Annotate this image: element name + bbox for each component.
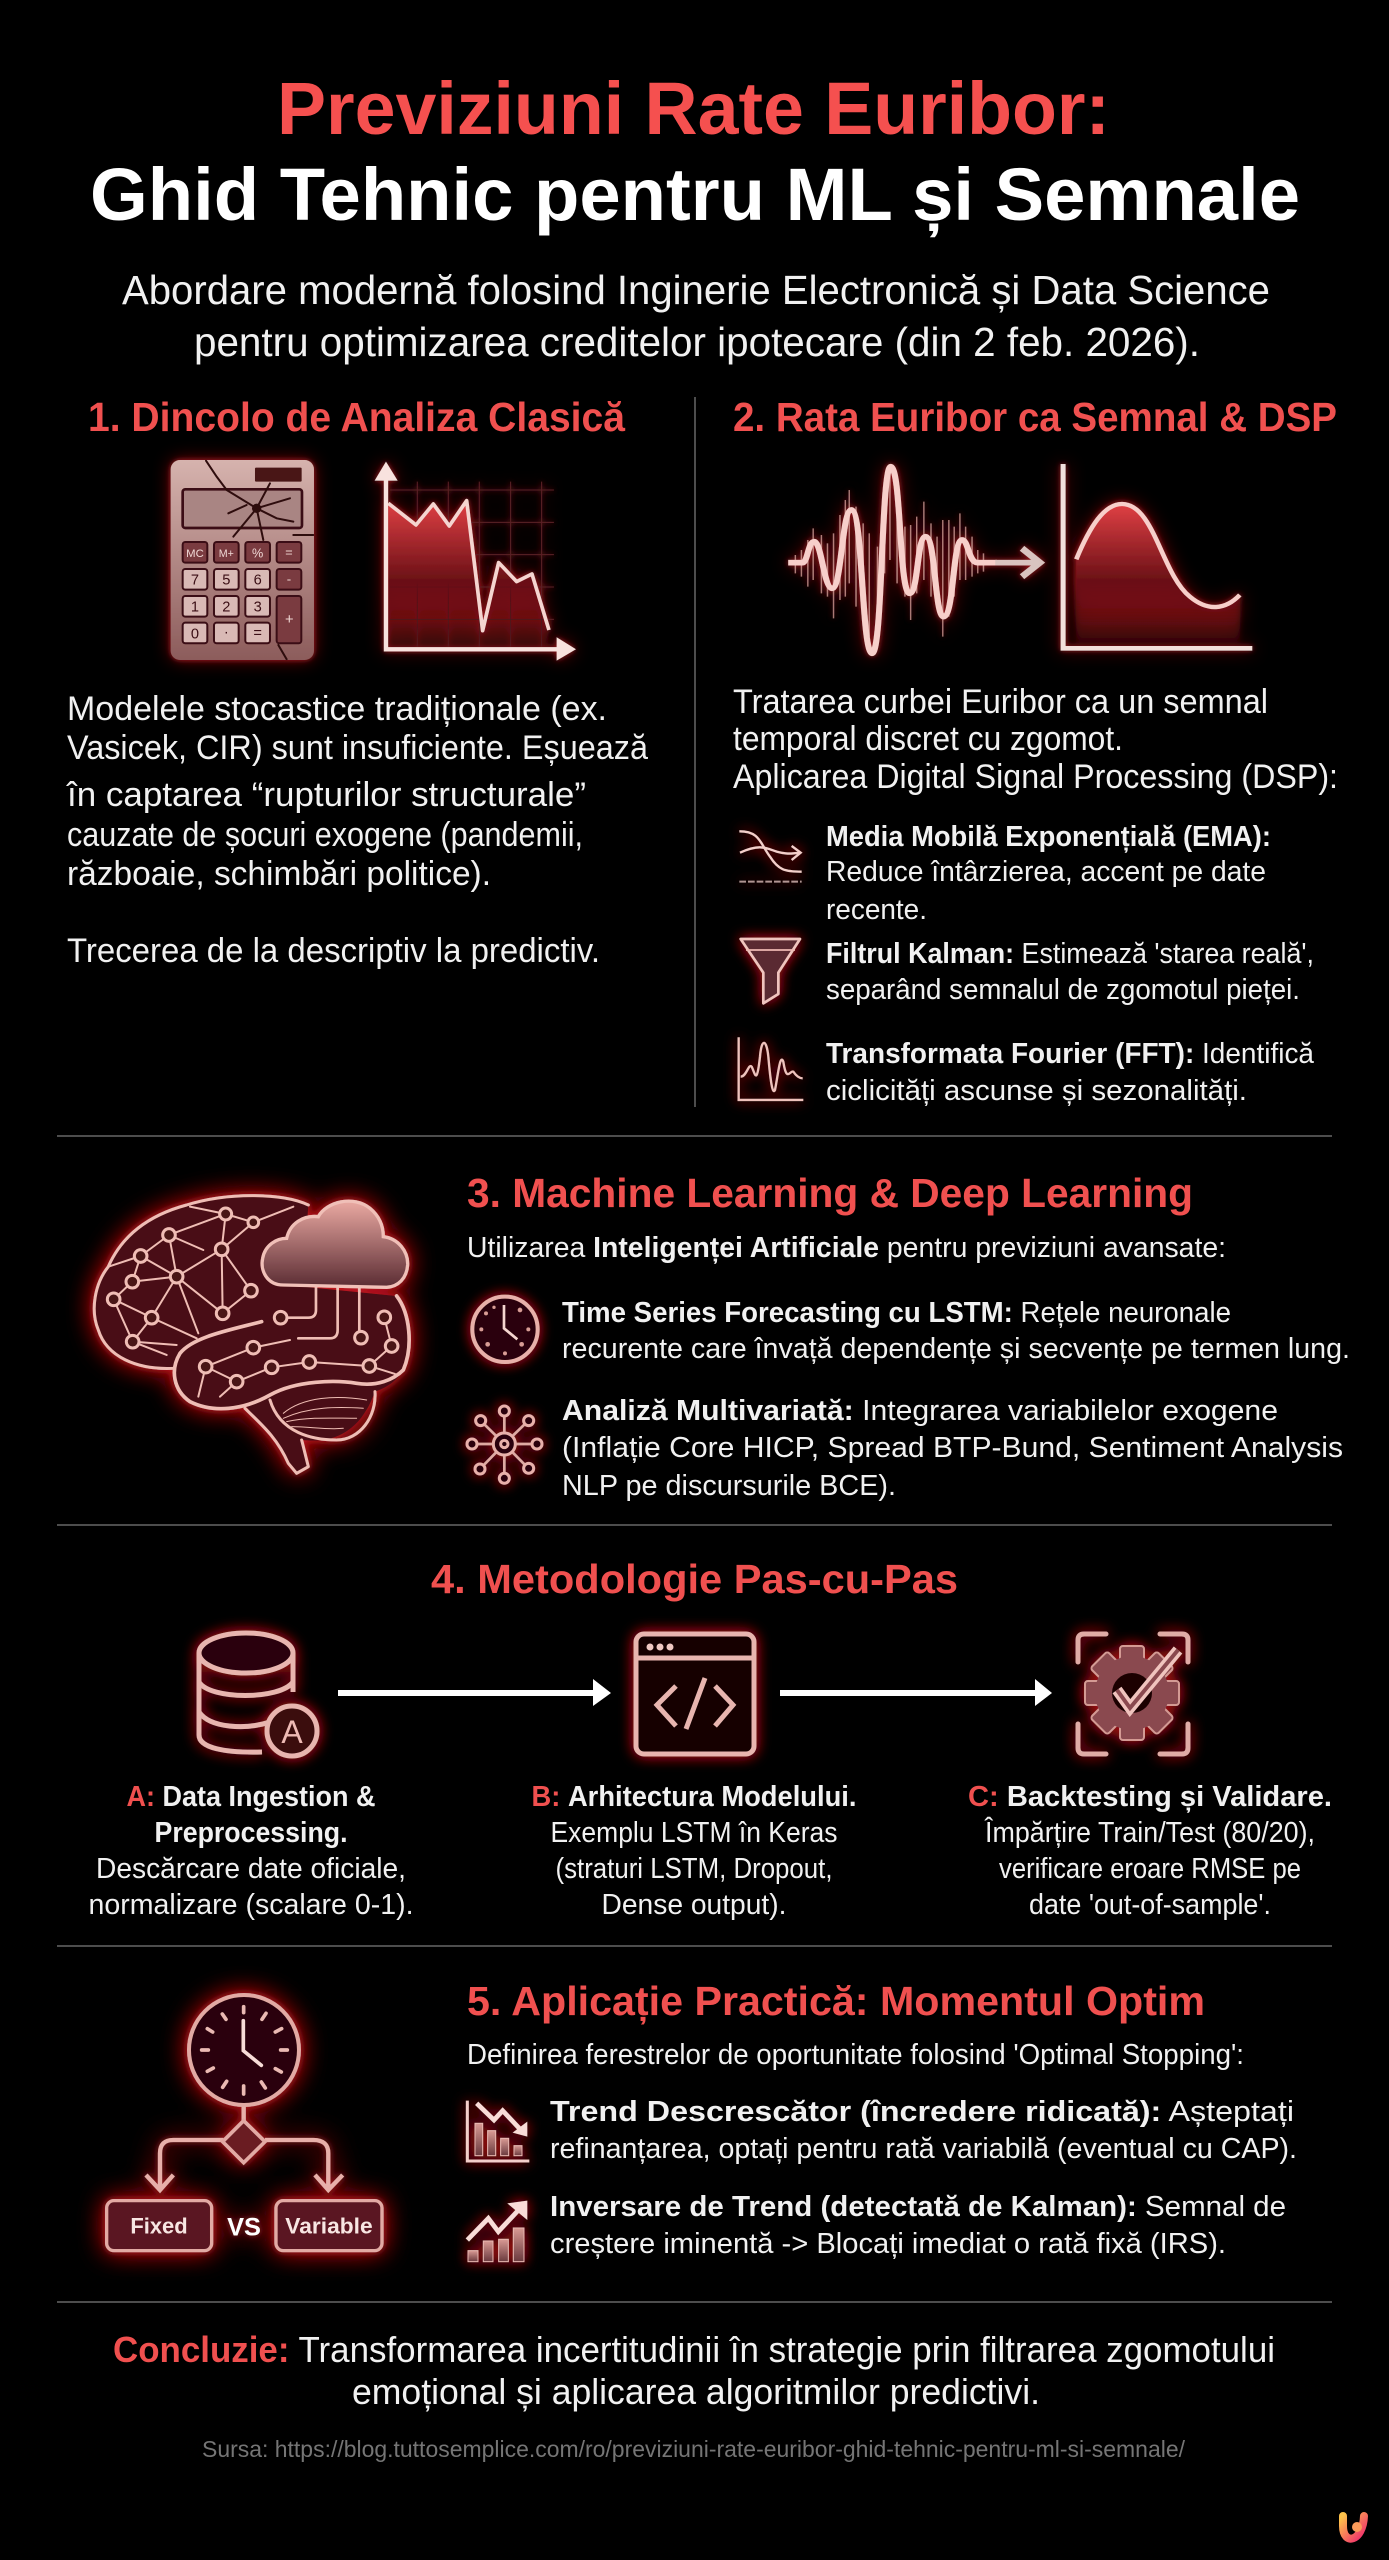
source: Sursa: https://blog.tuttosemplice.com/ro/previziuni-rate-euribor-ghid-tehnic-pentru-ml-si-semnale/ [202,2436,1186,2462]
subtitle: pentru optimizarea creditelor ipotecare (din 2 feb. 2026). [194,319,1200,365]
heading: section 2: 2. Rata Euribor ca Semnal & DSP [733,394,1337,440]
step B text: Dense output). [602,1889,786,1921]
step A text: Descărcare date oficiale, [96,1853,406,1885]
text: multivariate: NLP pe discursurile BCE). [562,1470,896,1502]
text block: classic models: în captarea “rupturilor structurale” [66,776,586,814]
text: Kalman: separând semnalul de zgomotul pieței. [826,974,1300,1006]
panel: section 2 [733,394,1338,1107]
icon: rising bars [467,2201,527,2262]
chart: filtered signal curve [1063,464,1252,648]
icon: clock [472,1297,538,1362]
icon: clock decision fixed vs variable: VS [227,2213,261,2241]
icon: clock decision fixed vs variable: Variable [285,2213,373,2238]
arrow: B to C [780,1679,1052,1706]
text: Kalman [826,938,1314,1006]
text: falling trend: refinanțarea, optați pentru rată variabilă (eventual cu CAP). [550,2133,1297,2165]
text: trend reversal: creștere iminentă -> Blocați imediat o rată fixă (IRS). [550,2228,1226,2260]
text: EMA: Media Mobilă Exponențială (EMA): [826,821,1271,853]
panel: section 4 [88,1556,1332,1921]
text: trend reversal [550,2191,1286,2260]
text: multivariate [562,1395,1343,1502]
icon: cracked calculator: 3 [254,600,262,616]
step B text [532,1781,856,1921]
text: LSTM [562,1297,1350,1365]
subtitle [122,267,1270,365]
conclusion: Concluzie: Transformarea incertitudinii în strategie prin filtrarea zgomotului [113,2329,1275,2370]
text block: signal intro [733,683,1338,796]
heading: section 4: 4. Metodologie Pas-cu-Pas [431,1556,958,1602]
title [90,67,1300,237]
icon: gear with check [1078,1634,1188,1754]
icon: cracked calculator: 0 [191,626,199,642]
icon: cracked calculator: + [285,612,294,628]
icon: code window [636,1634,754,1754]
icon: cracked calculator: 2 [222,600,230,616]
icon: cracked calculator: 7 [191,573,199,589]
heading: section 3: 3. Machine Learning & Deep Learning [467,1170,1193,1216]
text block: classic models: Trecerea de la descriptiv la predictiv. [67,932,600,970]
text block: signal intro: Tratarea curbei Euribor ca un semnal [733,683,1268,721]
text: EMA [826,821,1271,926]
conclusion [113,2329,1275,2412]
icon: cracked calculator: % [252,546,263,560]
icon: multivariate network [467,1406,542,1483]
icon: noisy signal with arrow [788,467,1040,653]
icon: EMA [739,831,802,882]
text: falling trend: Trend Descrescător (încredere ridicată): Așteptați [550,2096,1294,2128]
icon: database: A [281,1714,303,1750]
icon: brain with cloud [94,1196,409,1473]
step C text: date 'out-of-sample'. [1029,1889,1271,1921]
icon: cracked calculator: MC [186,548,204,560]
icon: cracked calculator: 1 [191,600,199,616]
step A text [88,1781,414,1921]
icon: database [199,1633,317,1756]
step A text: normalizare (scalare 0-1). [88,1889,414,1921]
panel: section 3 [94,1170,1350,1502]
subtitle: Abordare modernă folosind Inginerie Electronică și Data Science [122,267,1270,313]
text: falling trend [550,2096,1297,2165]
icon: cracked calculator: · [224,625,229,641]
icon: cracked calculator: 5 [222,573,230,589]
text: LSTM: Time Series Forecasting cu LSTM: Rețele neuronale [562,1297,1231,1329]
text: FFT: ciclicități ascunse și sezonalități. [826,1075,1247,1107]
text block: signal intro: temporal discret cu zgomot. [733,720,1123,758]
text block: classic models: Vasicek, CIR) sunt insuficiente. Eșuează [67,729,648,767]
icon: cracked calculator: 6 [254,573,262,589]
icon: cracked calculator: = [253,625,262,641]
step B text: (straturi LSTM, Dropout, [556,1853,832,1885]
panel: section 5 [107,1978,1297,2262]
text: LSTM: recurente care învață dependențe și secvențe pe termen lung. [562,1333,1350,1365]
step C text [968,1781,1332,1921]
icon: clock decision fixed vs variable [107,1995,382,2251]
icon: cracked calculator: - [287,571,291,586]
icon: FFT [739,1037,803,1100]
conclusion: emoțional și aplicarea algoritmilor predictivi. [352,2371,1040,2412]
text: AI intro: Utilizarea Inteligenței Artificiale pentru previziuni avansate: [467,1232,1226,1264]
step A text: A: Data Ingestion & [126,1781,376,1813]
step C text: verificare eroare RMSE pe [999,1853,1301,1885]
text: trend reversal: Inversare de Trend (detectată de Kalman): Semnal de [550,2191,1286,2223]
chart: falling line with grid [375,462,576,661]
icon: cracked calculator: = [285,546,293,560]
text: Kalman: Filtrul Kalman: Estimează 'starea reală', [826,938,1314,970]
icon: cracked calculator [171,460,314,660]
text block: classic models: războaie, schimbări politice). [67,855,491,893]
step C text: Împărțire Train/Test (80/20), [984,1816,1315,1849]
panel: section 1 [66,394,648,970]
text block: signal intro: Aplicarea Digital Signal Processing (DSP): [733,758,1338,796]
text block: classic models: Modelele stocastice tradiționale (ex. [67,690,607,728]
step B text: B: Arhitectura Modelului. [532,1781,856,1813]
title: Ghid Tehnic pentru ML și Semnale [90,153,1300,237]
icon: Kalman funnel [741,939,800,1003]
title: Previziuni Rate Euribor: [277,67,1110,150]
text: optimal stopping intro: Definirea ferestrelor de oportunitate folosind 'Optimal Stopping': [467,2039,1244,2071]
icon: cracked calculator: M+ [219,548,234,560]
step B text: Exemplu LSTM în Keras [550,1817,838,1849]
heading: section 1: 1. Dincolo de Analiza Clasică [88,394,626,440]
text: EMA: recente. [826,894,927,926]
text: FFT [826,1038,1315,1107]
step A text: Preprocessing. [154,1817,348,1849]
arrow: A to B [338,1679,611,1706]
icon: logo [1343,2516,1364,2539]
text: EMA: Reduce întârzierea, accent pe date [826,856,1266,888]
icon: falling bars [467,2101,529,2161]
text: multivariate: (Inflație Core HICP, Spread BTP-Bund, Sentiment Analysis [562,1432,1343,1464]
text block: classic models [66,690,648,970]
text block: classic models: cauzate de șocuri exogene (pandemii, [67,816,583,854]
heading: section 5: 5. Aplicație Practică: Momentul Optim [467,1978,1205,2024]
text: FFT: Transformata Fourier (FFT): Identifică [826,1038,1315,1070]
step C text: C: Backtesting și Validare. [968,1781,1332,1813]
icon: clock decision fixed vs variable: Fixed [130,2213,188,2238]
text: multivariate: Analiză Multivariată: Integrarea variabilelor exogene [562,1395,1278,1427]
